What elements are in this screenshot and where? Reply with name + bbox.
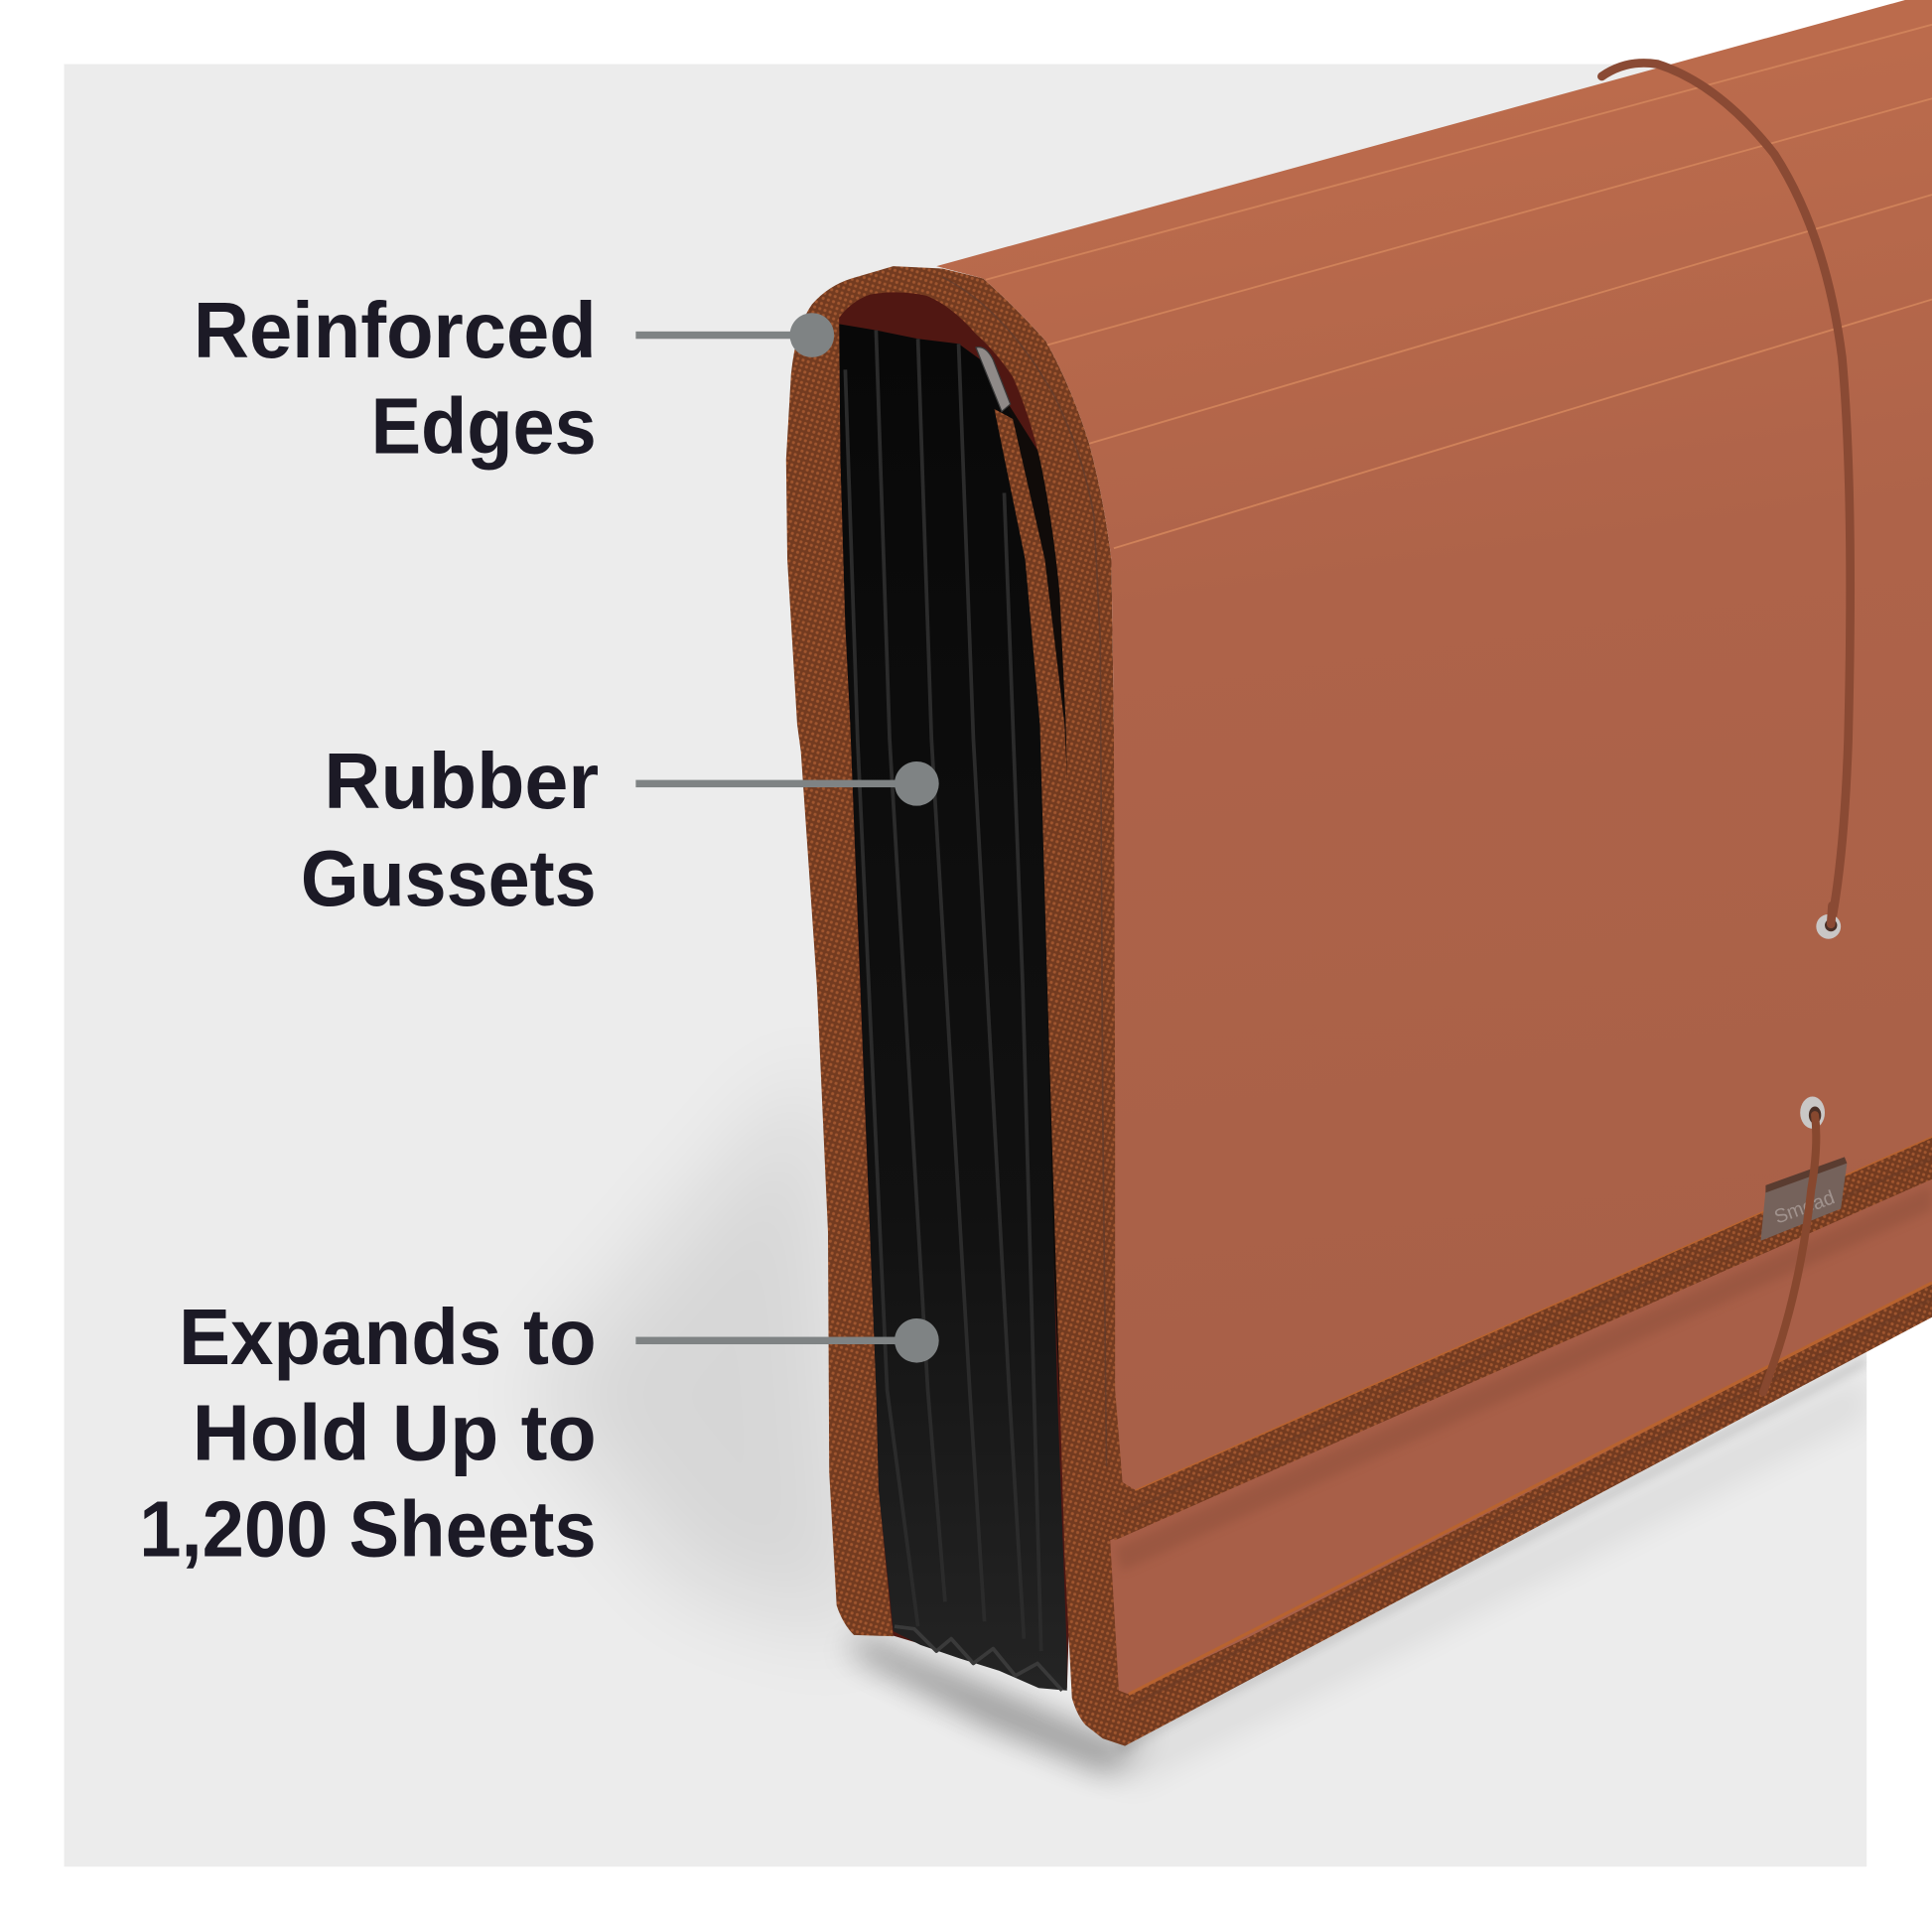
gusset body — [839, 324, 1067, 1691]
flap lower band shadow on pocket — [1115, 1185, 1932, 1571]
elastic lower cord — [1763, 1115, 1816, 1392]
cast shadow on the floor — [530, 1059, 1866, 1787]
leader line and dot — [635, 761, 939, 806]
gusset pleats at the base — [895, 1626, 1062, 1691]
label: expands to hold up to 1,200 sheets: Expands to — [179, 1293, 597, 1381]
expanding file product — [786, 0, 1932, 1746]
inner front binding strand — [995, 409, 1084, 1390]
leader line and dot — [635, 1318, 939, 1363]
label: expands to hold up to 1,200 sheets: 1,200 Sheets — [139, 1484, 597, 1573]
reinforced fabric binding: back edge and top arch — [786, 266, 1124, 1636]
callout: rubber gussets — [301, 737, 939, 922]
callout: reinforced edges — [194, 286, 834, 471]
label: rubber gussets: Rubber — [324, 737, 599, 825]
elastic upper cord — [1601, 63, 1851, 918]
flap lower fabric band — [1080, 1136, 1932, 1540]
label: rubber gussets — [301, 737, 599, 922]
flap fold lines — [986, 25, 1932, 548]
label: expands to hold up to 1,200 sheets — [139, 1293, 597, 1573]
label: expands to hold up to 1,200 sheets: Hold Up to — [193, 1389, 597, 1477]
leader line and dot — [635, 313, 834, 357]
label: reinforced edges: Reinforced — [194, 286, 597, 374]
flap face — [936, 0, 1932, 1489]
label: reinforced edges — [194, 286, 597, 471]
metal staple at the top of the gusset — [976, 347, 1011, 412]
lower eyelet — [1800, 1097, 1825, 1129]
callout: capacity — [139, 1293, 939, 1573]
interior lining — [830, 283, 1077, 1688]
dark gap behind the binding — [995, 382, 1084, 1405]
lower pocket binding — [1059, 1232, 1932, 1746]
label: reinforced edges: Edges — [371, 382, 597, 471]
binding seam line — [942, 277, 1106, 1466]
rubber gussets — [839, 324, 1067, 1691]
lower binding highlight edge — [1129, 1283, 1932, 1694]
flap band highlight edge — [1135, 1136, 1932, 1489]
metal brand tag: Smead — [1771, 1186, 1838, 1228]
gusset strip highlights — [845, 331, 1041, 1651]
lower pocket face — [1110, 1171, 1932, 1694]
flap band stitching — [1124, 1159, 1932, 1513]
upper eyelet — [1816, 905, 1841, 939]
label: rubber gussets: Gussets — [301, 834, 597, 922]
lower binding stitching — [1129, 1299, 1932, 1707]
metal brand tag — [1760, 1157, 1847, 1241]
